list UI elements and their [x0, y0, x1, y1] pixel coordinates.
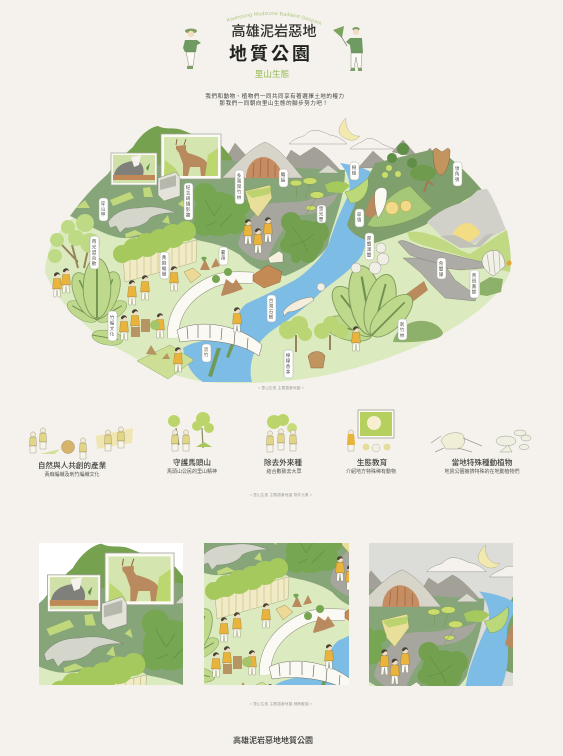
- illustrated map: [45, 118, 512, 383]
- map labels: [90, 162, 479, 378]
- feature: local species: [431, 430, 531, 475]
- glowing mushrooms: [290, 178, 324, 214]
- bridge: [177, 324, 262, 356]
- owl chicks: [386, 200, 412, 214]
- vending wall: [158, 172, 180, 201]
- feature: remove invasive species: 結合數致去大眾: [266, 468, 302, 475]
- upper central scene: [70, 118, 394, 282]
- top trees: [382, 143, 436, 192]
- barn owl: [365, 187, 387, 218]
- striped hill: [367, 186, 432, 227]
- sun: [452, 223, 480, 242]
- detail crop: weaving workers and bridge: [204, 543, 349, 685]
- elements caption: < 里山生態 主題插畫地圖 物件元素 >: [250, 492, 312, 497]
- map labels: 流竹: [203, 346, 209, 359]
- sage forest right: [347, 150, 482, 243]
- dark bush centre right: [280, 212, 329, 263]
- map labels: 螢光蕈: [318, 205, 324, 222]
- curved English park name: Kaohsiung Mudstone Badland Geopark: [226, 12, 322, 25]
- weaver workers: [52, 266, 242, 372]
- title block: 那我們一同朝向里山生態的腳步努力吧！: [220, 99, 328, 107]
- grey footpath: [238, 192, 338, 260]
- distant grey mountains: [222, 143, 342, 172]
- right uplands: [347, 140, 482, 243]
- map labels: 黃麻編織: [161, 254, 167, 278]
- icon: workers and fence: [29, 427, 133, 459]
- clouds: [289, 130, 394, 149]
- deer photo frame: [161, 134, 221, 179]
- feature: guard Matou mountain: 馬頭山公民的里山精神: [167, 468, 217, 475]
- bamboo raft: [137, 345, 194, 379]
- icon: trees and people: [168, 412, 214, 451]
- subtitle: 里山生態: [255, 68, 290, 79]
- weaving basket: [184, 268, 201, 283]
- cave mountain: [222, 142, 303, 178]
- ground: [45, 158, 510, 383]
- lower left scene: [48, 214, 282, 379]
- feature: guard Matou mountain: 守護馬頭山: [173, 457, 211, 467]
- left trees: [48, 214, 100, 268]
- feature: local species: 當地特殊種動植物: [452, 457, 513, 467]
- small snow ridge: [318, 165, 339, 173]
- crab-eating mongoose rock: [398, 241, 484, 301]
- ranger right with flag: [333, 26, 363, 71]
- ranger left: [183, 29, 201, 69]
- fruit trees: [279, 316, 348, 352]
- map labels: 草鴞: [356, 211, 362, 224]
- lime shrubs row: [76, 187, 185, 238]
- dark green mountain: [97, 126, 232, 200]
- green patches right: [393, 277, 503, 342]
- terraced mudstone: [245, 185, 272, 217]
- map labels: 檸檬香茅: [285, 352, 291, 375]
- lower right scene: [279, 189, 512, 368]
- log: [398, 281, 428, 310]
- map labels: 薯蕷: [220, 249, 226, 262]
- icon: owl display board: [347, 410, 394, 452]
- feature: local species: 地質公園擁擠特殊的在地動植物們: [444, 468, 520, 475]
- map labels: 紀念碑攝影牆: [185, 184, 191, 219]
- badger photo frame: [111, 153, 157, 185]
- icon: mushrooms: [496, 430, 531, 452]
- crate of logs: [253, 265, 282, 288]
- map labels: 時光盟合歡: [91, 239, 97, 267]
- map labels: 竹編文化: [109, 314, 115, 338]
- main title line 2: 地質公園: [229, 44, 313, 64]
- moon: [339, 118, 360, 140]
- lime field right: [407, 230, 511, 272]
- title block: [205, 12, 345, 107]
- map labels: 領角鴞: [454, 165, 460, 183]
- cottage: [268, 251, 283, 263]
- map labels: 穿山甲: [100, 200, 106, 218]
- crabs: [317, 243, 389, 291]
- map labels: 台灣石鮒: [268, 297, 274, 321]
- feature: remove invasive species: 除去外來種: [264, 457, 302, 467]
- detail crop: deer and pangolin: [39, 543, 183, 685]
- map labels: 青斑鳳蝶: [471, 272, 477, 296]
- map labels: 食蟹獴: [438, 260, 444, 278]
- detail crop: cave and river: [369, 543, 513, 686]
- icon: people in trees: [266, 414, 297, 452]
- map caption: < 里山生態 主題插畫地圖 >: [258, 385, 304, 390]
- far grey peaks right: [358, 140, 442, 168]
- map labels: 多寬葉竹林: [236, 172, 242, 201]
- fish: [283, 297, 314, 316]
- big leaf plant right: [321, 263, 420, 346]
- feature: industry: [29, 427, 133, 478]
- feature: industry: 黃麻編織及刺竹編織文化: [44, 471, 100, 478]
- sage forest left: [70, 160, 345, 276]
- stone mountain front: [440, 233, 495, 248]
- feature: remove invasive species: [264, 414, 302, 475]
- detail caption: < 里山生態 主題插畫地圖 細節截圖 >: [250, 701, 312, 706]
- lime hedge: [113, 221, 196, 263]
- main title line 1: 高雄泥岩惡地: [231, 24, 317, 40]
- map labels: 蝙蝠: [280, 171, 286, 184]
- frog leaf: [325, 178, 368, 203]
- map labels: 樹蛙: [351, 164, 357, 177]
- intro text: 我們和動物、植物們一同共同享有著選擇土地的權力: [205, 92, 345, 100]
- icon: crab: [431, 433, 482, 452]
- pangolin: [108, 207, 177, 233]
- farmer: [352, 326, 360, 351]
- large leaf plant left: [64, 258, 130, 348]
- hikers group: [244, 217, 272, 253]
- map labels: 刺竹林: [399, 321, 405, 339]
- feature: industry: 自然與人共創的產業: [38, 460, 107, 470]
- baskets: [131, 319, 170, 359]
- right hill grey: [427, 189, 506, 245]
- map labels: 厚蟹澤蟹: [366, 236, 372, 259]
- feature: eco education: 介紹地方特殊稀有動物: [346, 468, 396, 475]
- feature: eco education: 生態教育: [357, 457, 388, 467]
- brown tubers: [200, 257, 243, 296]
- river: [183, 163, 378, 382]
- footer title: 高雄泥岩惡地地質公園: [233, 735, 313, 745]
- dark bush centre left: [193, 183, 250, 236]
- white path: [173, 277, 253, 338]
- fruit basket: [308, 352, 325, 368]
- horned owl: [433, 148, 450, 175]
- bamboo fence: [123, 240, 197, 282]
- butterfly: [482, 250, 512, 276]
- feature: guard Matou mountain: [167, 412, 217, 475]
- feature: eco education: [346, 410, 396, 475]
